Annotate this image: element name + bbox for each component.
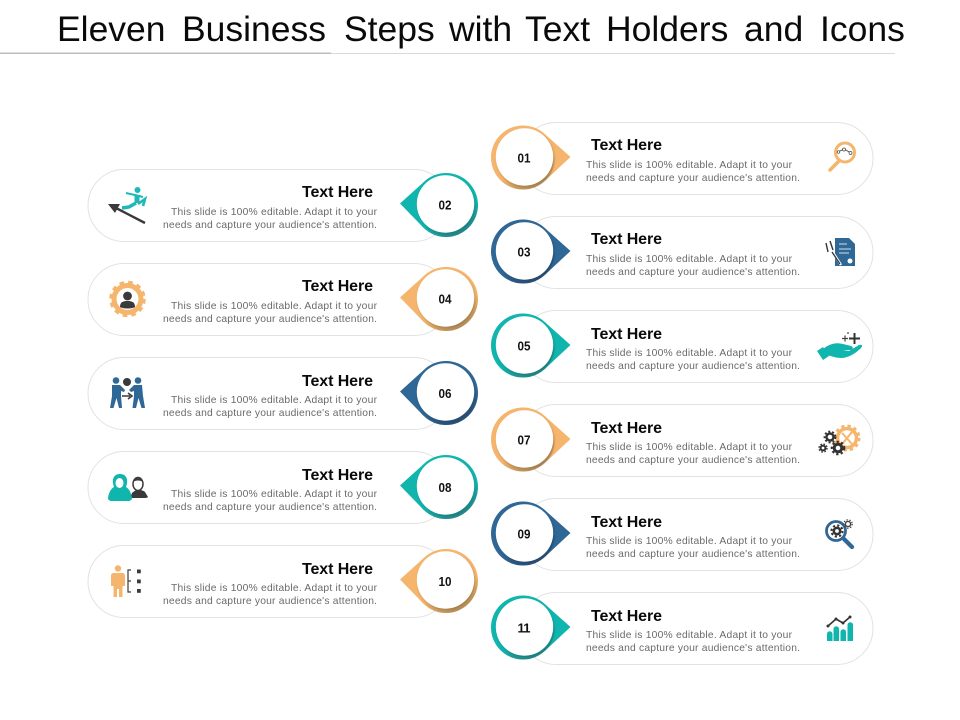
step 03 <box>491 216 873 288</box>
step 02: 02 <box>438 198 452 212</box>
step 05: Text Here <box>591 326 662 343</box>
step 08: needs and capture your audience's attention. <box>163 502 377 513</box>
step 11: needs and capture your audience's attention. <box>586 643 800 654</box>
step 07: Text Here <box>591 420 662 437</box>
icon: gear with person <box>111 282 144 316</box>
step 07 <box>491 404 873 476</box>
step 05 <box>491 310 873 382</box>
step 07: 07 <box>518 432 530 448</box>
step 08: Text Here <box>302 467 373 484</box>
icon: magnifier with gears <box>826 520 852 547</box>
step 11 <box>491 592 873 664</box>
step 01: This slide is 100% editable. Adapt it to your <box>586 160 793 171</box>
step 11: Text Here <box>591 608 662 625</box>
step 09 <box>491 498 873 570</box>
icon: two people exchanging <box>110 377 145 408</box>
title: Icons <box>820 9 905 49</box>
title: Business <box>182 9 326 49</box>
step 10: Text Here <box>302 561 373 578</box>
icon: magnifier <box>830 143 854 170</box>
title: with <box>448 9 512 49</box>
step 06: Text Here <box>302 373 373 390</box>
step 08: This slide is 100% editable. Adapt it to your <box>171 489 378 500</box>
step 01 <box>491 122 873 194</box>
step 06: 06 <box>438 386 452 401</box>
step 03: 03 <box>518 244 530 260</box>
icon: document and pen <box>826 238 855 266</box>
step 10 <box>88 546 478 618</box>
title: and <box>744 9 803 49</box>
step 09: needs and capture your audience's attention. <box>586 549 800 560</box>
icon: woman and man <box>108 474 148 501</box>
step 01: needs and capture your audience's attention. <box>586 173 800 184</box>
step 07: needs and capture your audience's attention. <box>586 455 800 466</box>
step 02: This slide is 100% editable. Adapt it to your <box>171 207 378 218</box>
step 02: Text Here <box>302 184 373 201</box>
step 04: This slide is 100% editable. Adapt it to your <box>171 301 378 312</box>
step 11: This slide is 100% editable. Adapt it to your <box>586 630 793 641</box>
step 04: Text Here <box>302 278 373 295</box>
step 08 <box>88 452 478 524</box>
step 05: This slide is 100% editable. Adapt it to your <box>586 348 793 359</box>
step 03: needs and capture your audience's attention. <box>586 267 800 278</box>
step 10: This slide is 100% editable. Adapt it to your <box>171 583 378 594</box>
step 05: 05 <box>518 338 530 354</box>
step 01: Text Here <box>591 137 662 154</box>
step 05: needs and capture your audience's attention. <box>586 361 800 372</box>
icon: bar chart with trend line <box>826 616 853 641</box>
step 11: 11 <box>518 620 530 636</box>
title: Text <box>525 9 590 49</box>
icon: gears <box>819 426 859 454</box>
step 04 <box>88 264 478 336</box>
step 09: This slide is 100% editable. Adapt it to your <box>586 536 793 547</box>
step 02: needs and capture your audience's attention. <box>163 220 377 231</box>
step 02 <box>88 170 478 242</box>
step 09: Text Here <box>591 514 662 531</box>
step 07: This slide is 100% editable. Adapt it to your <box>586 442 793 453</box>
step 01: 01 <box>518 150 530 166</box>
step 10: 10 <box>438 574 452 589</box>
step 03: This slide is 100% editable. Adapt it to your <box>586 254 793 265</box>
step 09: 09 <box>518 526 530 542</box>
step 04: 04 <box>438 292 452 306</box>
icon: person with branching list <box>111 565 141 597</box>
title: Eleven <box>57 9 166 49</box>
step 03: Text Here <box>591 231 662 248</box>
icon: runner climbing arrow <box>108 187 145 223</box>
step 08: 08 <box>438 480 452 495</box>
title: Holders <box>606 9 728 49</box>
step 06: needs and capture your audience's attention. <box>163 408 377 419</box>
step 10: needs and capture your audience's attention. <box>163 596 377 607</box>
step 06: This slide is 100% editable. Adapt it to your <box>171 395 378 406</box>
step 04: needs and capture your audience's attention. <box>163 314 377 325</box>
icon: hand with plus signs <box>817 332 862 360</box>
step 06 <box>88 358 478 430</box>
title: Steps <box>344 9 435 49</box>
